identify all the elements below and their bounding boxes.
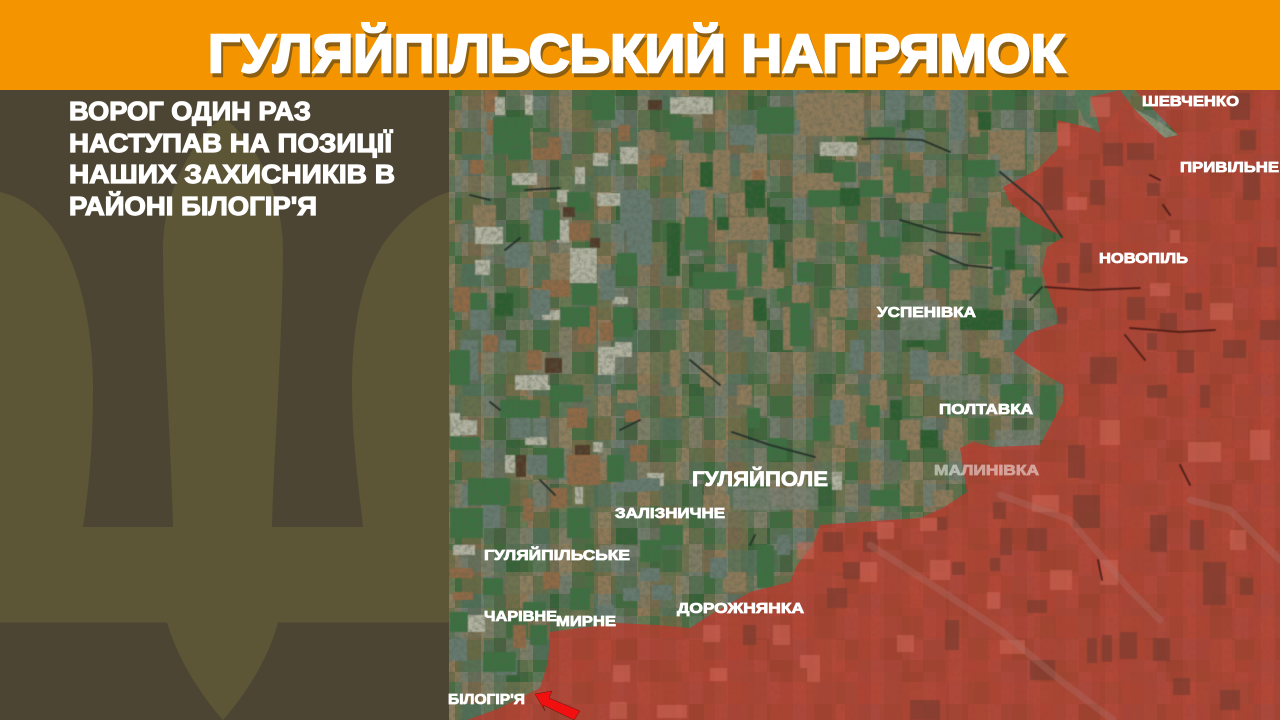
text block: situation summary: РАЙОНІ БІЛОГІР'Я — [69, 191, 317, 221]
map labels: ПРИВІЛЬНЕ — [1180, 159, 1279, 176]
map labels: ПОЛТАВКА — [939, 401, 1033, 418]
icon: trident emblem — [0, 118, 449, 720]
orange-brown fields — [450, 90, 764, 648]
map labels: НОВОПІЛЬ — [1099, 250, 1188, 267]
occupied zone field patches — [610, 93, 1280, 720]
gray-blue fields — [450, 90, 1012, 675]
map labels: ЧАРІВНЕ — [484, 608, 557, 625]
text block: situation summary — [69, 96, 395, 221]
dark green fields — [495, 112, 1015, 448]
map labels: УСПЕНІВКА — [877, 304, 976, 321]
map labels: ГУЛЯЙПОЛЕ — [692, 467, 828, 491]
arrow: pointing to Bilohir'ia — [535, 691, 580, 720]
map labels: МИРНЕ — [556, 613, 616, 630]
map labels: БІЛОГІР'Я — [448, 691, 525, 708]
map labels: ЗАЛІЗНИЧНЕ — [615, 505, 725, 522]
header banner — [0, 0, 1280, 90]
text block: situation summary: НАШИХ ЗАХИСНИКІВ В — [69, 159, 395, 189]
map labels: ДОРОЖНЯНКА — [677, 600, 804, 617]
tan fields — [473, 90, 1025, 592]
map: satellite terrain with occupied zone — [449, 90, 1280, 720]
occupied zone overlay — [467, 90, 1280, 720]
map labels: ГУЛЯЙПІЛЬСЬКЕ — [484, 546, 630, 564]
map labels: ШЕВЧЕНКО — [1142, 93, 1239, 110]
map labels — [448, 93, 1279, 708]
light bare fields — [450, 95, 857, 632]
map labels: МАЛИНІВКА — [934, 462, 1039, 479]
panel: left sidebar — [0, 90, 449, 720]
green wedge near Shevchenko — [1075, 90, 1135, 133]
text block: situation summary: НАСТУПАВ НА ПОЗИЦІЇ — [69, 128, 393, 158]
dark burnt fields — [516, 100, 662, 477]
ravines and rivers — [470, 139, 1280, 720]
town grey area — [600, 300, 1040, 557]
text block: situation summary: ВОРОГ ОДИН РАЗ — [69, 96, 311, 126]
title: ГУЛЯЙПІЛЬСЬКИЙ НАПРЯМОК — [208, 23, 1066, 84]
green fields — [450, 90, 1056, 672]
title: ГУЛЯЙПІЛЬСЬКИЙ НАПРЯМОК — [210, 27, 1068, 88]
